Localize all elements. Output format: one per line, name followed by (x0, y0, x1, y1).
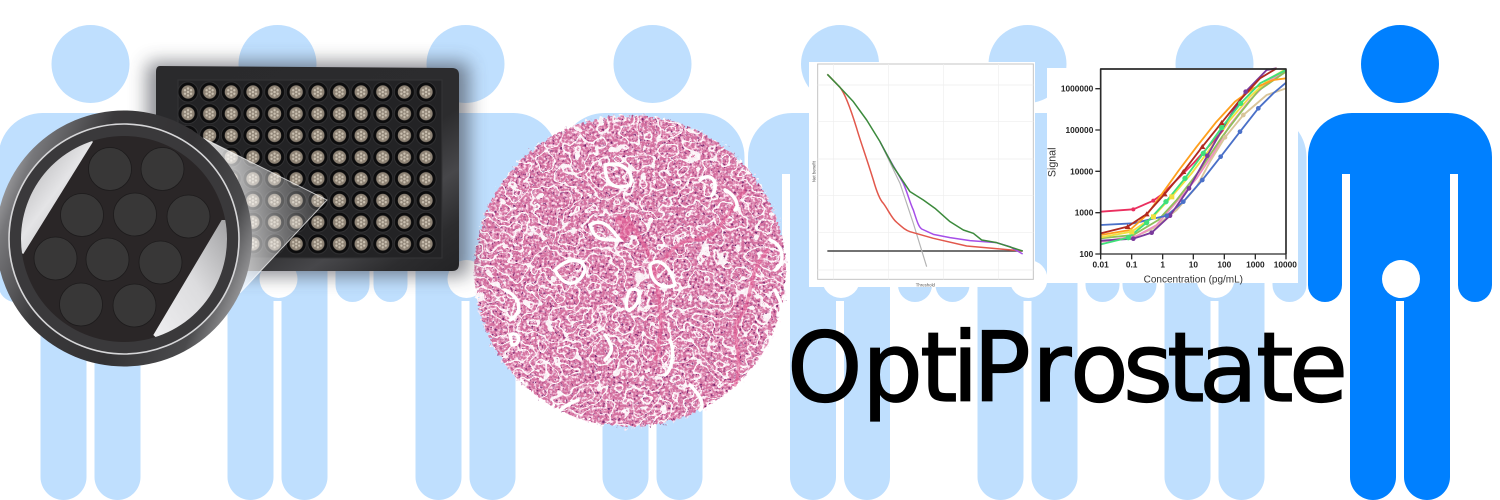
x axis title: Concentration (pg/mL) (1144, 274, 1243, 285)
tan curve (1101, 88, 1286, 242)
treat-all grey line (880, 142, 927, 267)
decision curve chart (809, 62, 1035, 287)
x axis label: Threshold (916, 282, 936, 287)
plate inner rim (178, 80, 442, 258)
y tick labels: 100 (1079, 249, 1094, 259)
red curve (827, 74, 1023, 251)
plot axes (1101, 69, 1286, 254)
dark red curve (1101, 68, 1277, 233)
gland lumens (505, 164, 782, 420)
y tick labels: 1000000 (1061, 84, 1094, 94)
title: OptiProstate (787, 312, 1348, 424)
y axis label: Net benefit (811, 160, 816, 182)
data markers (1125, 89, 1261, 241)
x tick labels: 0.1 (1126, 259, 1138, 269)
y tick labels (1061, 84, 1094, 259)
metal ring (0, 110, 252, 366)
dose response chart (1046, 68, 1298, 285)
magnifier glass beam (170, 138, 327, 293)
chart background (1047, 68, 1298, 283)
ten spots (34, 148, 210, 327)
plate shadow (147, 62, 469, 276)
y tick labels: 1000 (1075, 208, 1094, 218)
x tick labels: 0.01 (1093, 259, 1109, 269)
green curve (827, 74, 1023, 251)
orange curve (1101, 78, 1286, 235)
threshold baseline (827, 249, 1023, 253)
silver strips (21, 141, 227, 337)
highlighted man icon in saturated blue (1308, 25, 1492, 500)
yellow curve (1101, 69, 1286, 237)
bright green curve (1101, 70, 1286, 244)
y tick labels: 10000 (1070, 166, 1094, 176)
ring inner band (9, 124, 239, 354)
purple curve (880, 142, 1023, 254)
x tick labels: 10000 (1274, 259, 1297, 269)
well grid (177, 81, 437, 255)
x tick labels: 100 (1217, 259, 1232, 269)
chart background (809, 62, 1035, 287)
olive curve (1101, 72, 1286, 238)
blue curve (1101, 83, 1286, 225)
pink curve (1101, 71, 1286, 242)
microplate (147, 62, 469, 276)
y tick labels: 100000 (1066, 125, 1094, 135)
x tick labels: 1 (1160, 259, 1165, 269)
stromal veins in deeper pink (620, 190, 768, 385)
x tick labels (1093, 259, 1297, 269)
y axis title: Signal (1046, 148, 1058, 177)
x tick labels: 1000 (1246, 259, 1265, 269)
tissue core micrograph (474, 115, 786, 427)
plate body (156, 66, 459, 271)
magnifier lens (0, 110, 252, 366)
x tick labels: 10 (1189, 259, 1198, 269)
lens floor (21, 136, 227, 342)
crimson curve (1101, 130, 1223, 212)
plot frame (818, 64, 1033, 279)
purple curve (1101, 68, 1277, 241)
